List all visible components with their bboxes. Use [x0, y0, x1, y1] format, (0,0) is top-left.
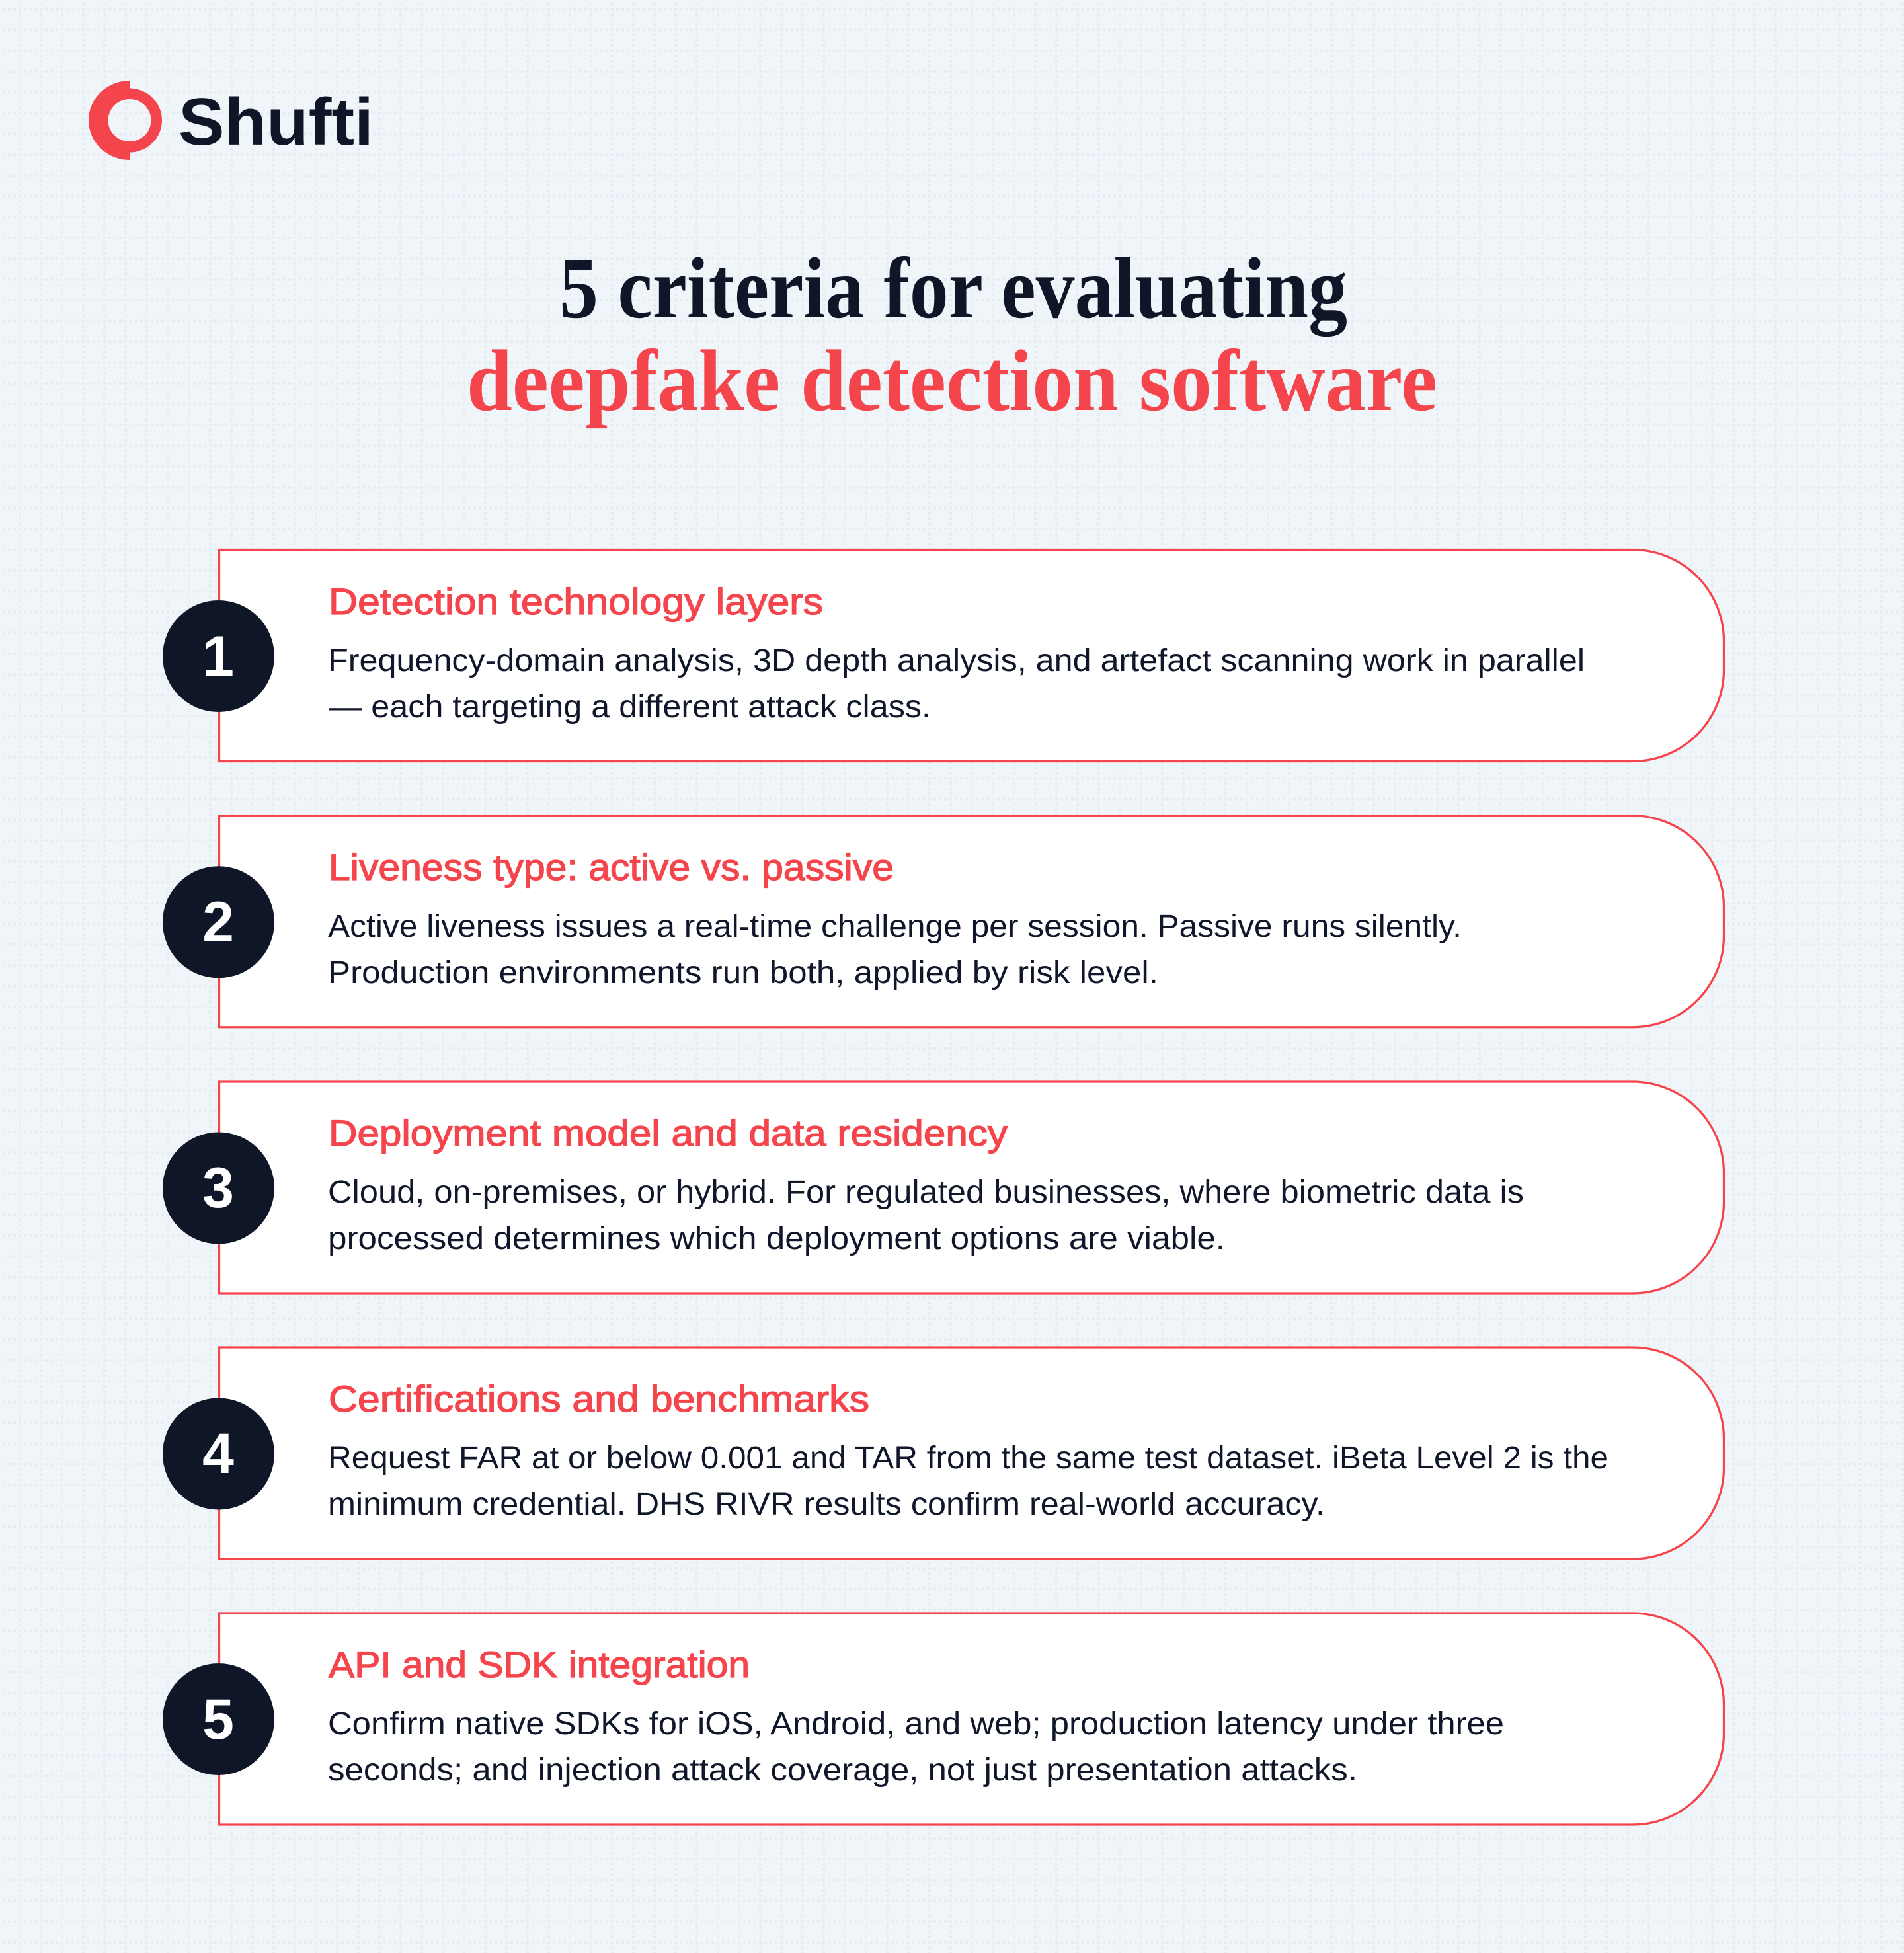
body text [328, 643, 1585, 725]
title line 1: 5 criteria for evaluating [559, 239, 1347, 337]
body text: minimum credential. DHS RIVR results confirm real-world accuracy. [328, 1487, 1325, 1522]
heading: Liveness type: active vs. passive [329, 846, 894, 888]
logo: Shufti [89, 81, 374, 160]
heading: Deployment model and data residency [329, 1112, 1008, 1154]
heading: Detection technology layers [329, 580, 823, 622]
number badge 4 [163, 1398, 274, 1510]
panel: criterion 2 [163, 816, 1724, 1027]
heading: API and SDK integration [329, 1644, 750, 1685]
body text: seconds; and injection attack coverage, not just presentation attacks. [328, 1753, 1357, 1788]
panel: criterion 3 [163, 1082, 1724, 1293]
body text: Active liveness issues a real-time challenge per session. Passive runs silently. [328, 909, 1462, 944]
card outline [219, 816, 1724, 1027]
card outline [219, 549, 1724, 762]
body text [328, 1175, 1524, 1256]
card outline [219, 1347, 1724, 1559]
body text: Cloud, on-premises, or hybrid. For regulated businesses, where biometric data is [328, 1175, 1524, 1210]
body text: Production environments run both, applied by risk level. [328, 955, 1158, 990]
icon: Shufti ring [89, 81, 162, 160]
number badge 3: 3 [202, 1156, 234, 1220]
title line 2: deepfake detection software [467, 332, 1437, 429]
heading: Certifications and benchmarks [329, 1378, 869, 1419]
number badge 5: 5 [202, 1688, 234, 1751]
title [467, 239, 1437, 429]
panel: criterion 1 [163, 549, 1724, 762]
body text: Frequency-domain analysis, 3D depth analysis, and artefact scanning work in parallel [328, 643, 1585, 678]
body text: Request FAR at or below 0.001 and TAR from the same test dataset. iBeta Level 2 is the [328, 1441, 1608, 1476]
number badge 5 [163, 1663, 274, 1775]
number badge 2 [163, 866, 274, 978]
body text [328, 1706, 1504, 1788]
card outline [219, 1082, 1724, 1293]
panel: criterion 5 [163, 1613, 1724, 1825]
number badge 3 [163, 1132, 274, 1244]
body text [328, 909, 1462, 990]
number badge 1: 1 [202, 625, 234, 688]
body text: Confirm native SDKs for iOS, Android, and web; production latency under three [328, 1706, 1504, 1741]
body text: — each targeting a different attack class. [329, 690, 931, 725]
card outline [219, 1613, 1724, 1825]
number badge 2: 2 [202, 891, 234, 954]
body text [328, 1441, 1608, 1522]
logo wordmark: Shufti [178, 85, 374, 159]
number badge 1 [163, 600, 274, 712]
body text: processed determines which deployment options are viable. [328, 1221, 1225, 1256]
panel: criterion 4 [163, 1347, 1724, 1559]
number badge 4: 4 [202, 1422, 234, 1486]
